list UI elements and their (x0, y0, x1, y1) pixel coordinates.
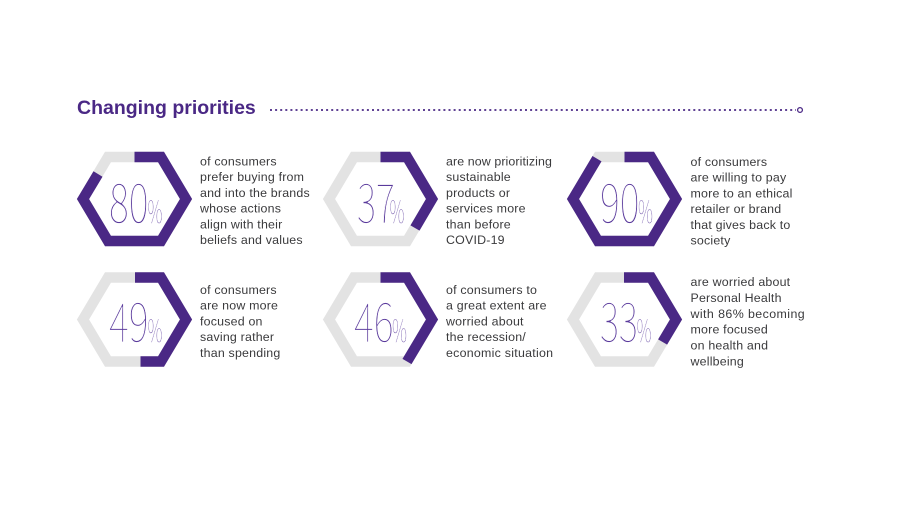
text 37%: than before (446, 217, 511, 231)
panel: 33% (573, 275, 805, 368)
number 46%: % (392, 307, 407, 352)
text 80%: align with their (200, 217, 282, 231)
text 49%: are now more (200, 299, 278, 313)
number 90%: % (638, 188, 653, 233)
text 80%: and into the brands (200, 186, 310, 200)
text 90%: that gives back to (690, 218, 791, 232)
text 46%: worried about (445, 314, 524, 328)
hexagon gauge 80% (83, 157, 186, 241)
hexagon gauge 49% (83, 278, 186, 362)
text 33%: are worried about (690, 275, 791, 289)
text 90%: society (690, 234, 731, 248)
number 49%: 49 (109, 278, 149, 358)
number 49%: % (148, 307, 163, 352)
text 80%: of consumers (200, 154, 277, 168)
text 46%: the recession/ (446, 330, 526, 344)
number 37%: % (390, 188, 405, 233)
hexagon gauge 46% (329, 278, 432, 362)
number 46%: 46 (354, 278, 394, 358)
number 37%: 37 (357, 160, 395, 240)
text 37%: sustainable (446, 170, 511, 184)
text 80%: whose actions (199, 202, 281, 216)
hexagon gauge 33% (573, 278, 676, 362)
text 46%: a great extent are (446, 299, 547, 313)
hexagon gauge 37% (329, 157, 432, 241)
number 90%: 90 (600, 159, 640, 239)
text 37%: services more (446, 202, 526, 216)
hexagon gauge 90% (573, 157, 676, 241)
text 46% (445, 283, 553, 360)
text 37%: COVID-19 (446, 233, 505, 247)
text 33%: more focused (690, 323, 768, 337)
text 49%: of consumers (200, 283, 277, 297)
text 80%: prefer buying from (200, 170, 304, 184)
number 80%: % (148, 188, 163, 233)
text 49%: than spending (200, 346, 280, 360)
text 49%: saving rather (200, 330, 274, 344)
text 37%: products or (446, 186, 510, 200)
number 33%: % (636, 307, 652, 352)
text 49%: focused on (200, 314, 263, 328)
text 33%: Personal Health (690, 291, 782, 305)
text 46%: of consumers to (446, 283, 537, 297)
text 90%: are willing to pay (690, 171, 787, 185)
panel: 37% (329, 154, 552, 247)
text 37% (446, 154, 552, 247)
text 33% (690, 275, 805, 368)
text 49% (200, 283, 280, 360)
text 33%: wellbeing (690, 354, 744, 368)
text 90%: retailer or brand (690, 202, 781, 216)
panel: 46% (329, 278, 553, 362)
text 33%: on health and (690, 339, 768, 353)
title: Changing priorities (77, 97, 256, 119)
text 80% (199, 154, 310, 247)
text 90%: more to an ethical (690, 186, 793, 200)
text 90%: of consumers (690, 155, 767, 169)
text 33%: with 86% becoming (690, 307, 805, 321)
text 46%: economic situation (446, 346, 553, 360)
text 80%: beliefs and values (200, 233, 303, 247)
number 33%: 33 (600, 279, 638, 359)
text 90% (690, 155, 793, 248)
panel: 90% (573, 155, 793, 248)
text 37%: are now prioritizing (446, 154, 552, 168)
panel: 49% (83, 278, 280, 362)
dotted line with end circle (270, 108, 802, 112)
number 80%: 80 (109, 159, 149, 239)
panel: 80% (83, 154, 310, 247)
